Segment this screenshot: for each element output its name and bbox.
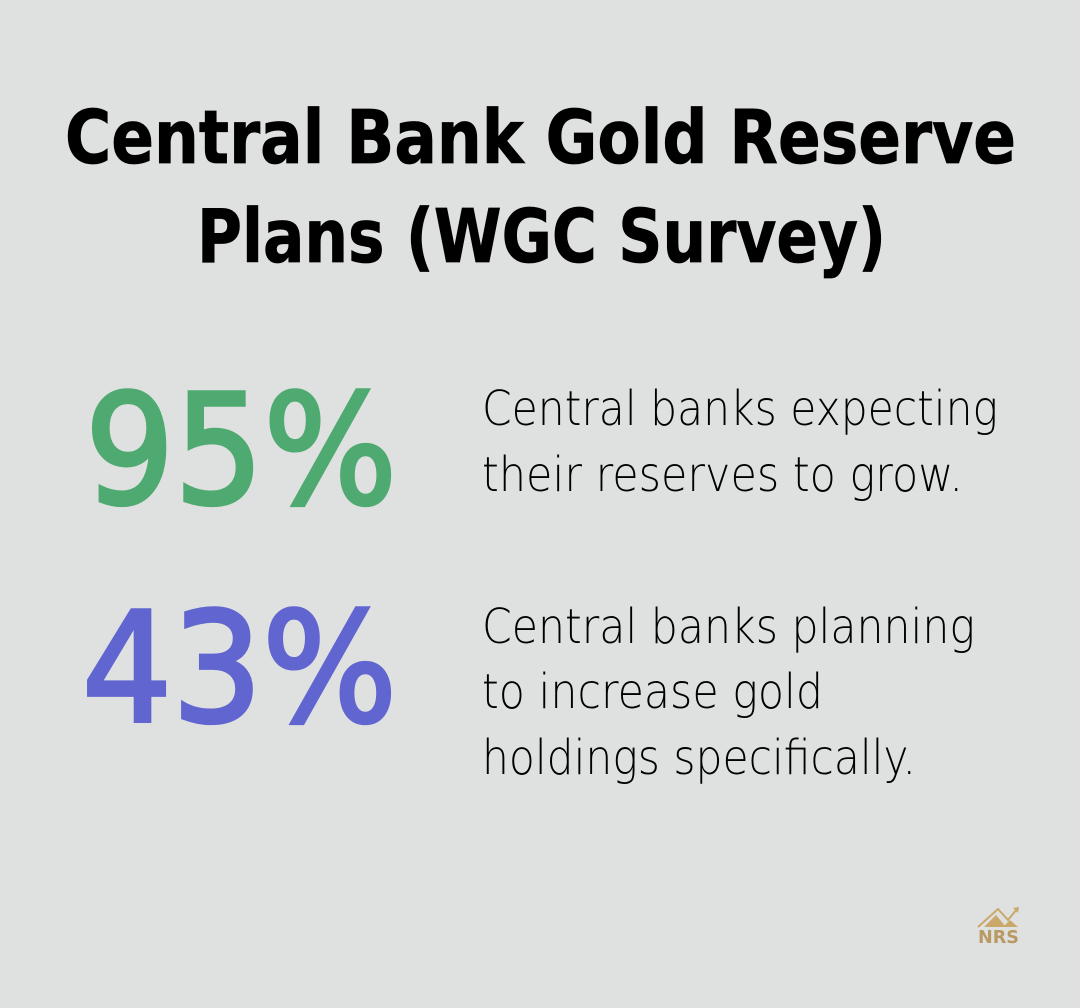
title: [65, 95, 1016, 280]
title: Plans (WGC Survey): [197, 194, 886, 280]
text: central banks planning to increase gold: to increase gold: [482, 664, 823, 720]
text: central banks planning to increase gold: Central banks planning: [482, 599, 975, 655]
text: central banks planning to increase gold: [482, 599, 975, 786]
icon: NRS logo: NRS: [978, 927, 1019, 948]
text: central banks expecting reserves to grow: their reserves to grow.: [482, 447, 963, 503]
text: central banks planning to increase gold: holdings specifically.: [482, 730, 916, 786]
text: central banks expecting reserves to grow: Central banks expecting: [482, 381, 998, 437]
stat: 43%: 43%: [82, 580, 397, 757]
stat: 95%: 95%: [85, 362, 397, 539]
icon: NRS logo: [978, 907, 1019, 948]
text: central banks expecting reserves to grow: [482, 381, 998, 503]
